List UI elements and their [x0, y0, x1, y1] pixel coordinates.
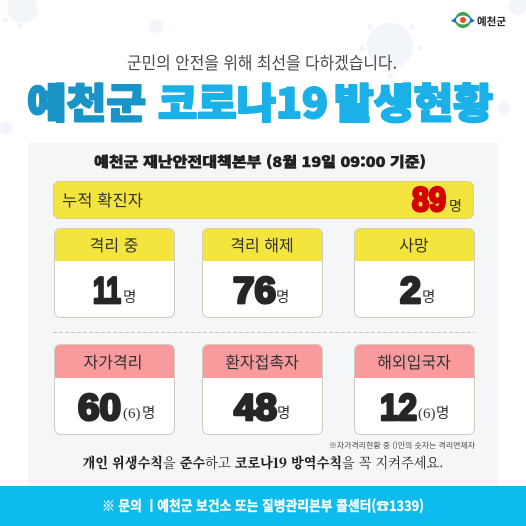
- card: released: [202, 228, 322, 318]
- card: overseas: (6): [418, 406, 436, 422]
- card: self quarantine: 60: [78, 387, 121, 428]
- card: self quarantine: [54, 344, 174, 434]
- title: [27, 70, 493, 130]
- panel heading: 예천군 재난안전대책본부 (8월 19일 09:00 기준): [94, 152, 426, 172]
- card: contacts: 명: [277, 402, 290, 423]
- card: in quarantine: 격리 중: [90, 232, 138, 256]
- card: overseas: 해외입국자: [377, 349, 451, 373]
- number: total: 89: [412, 181, 446, 219]
- card: deaths: 2: [400, 270, 421, 311]
- label: total: 누적 확진자: [62, 187, 143, 211]
- footer bar: [0, 486, 526, 526]
- icon: county emblem: [451, 12, 475, 28]
- title: 코로나19: [158, 70, 328, 130]
- total confirmed bar: [54, 181, 474, 219]
- logo: [451, 12, 506, 29]
- virus background: [0, 0, 526, 135]
- card: contacts: 48: [234, 387, 277, 428]
- card: released: 격리 해제: [230, 232, 294, 256]
- footnote: ※자가격리현황 중 ()안의 숫자는 격리면제자: [329, 440, 475, 451]
- card: overseas: [354, 344, 474, 434]
- subtitle: 군민의 안전을 위해 최선을 다하겠습니다.: [127, 49, 397, 74]
- hygiene notice: 개인 위생수칙을 준수하고 코로나19 방역수칙을 꼭 지켜주세요.: [83, 453, 443, 473]
- card: in quarantine: [54, 228, 174, 318]
- logo text: 예천군: [477, 14, 506, 29]
- card: deaths: 명: [422, 286, 435, 307]
- card: in quarantine: 11: [93, 270, 121, 311]
- card: released: 76: [233, 270, 276, 311]
- card: self quarantine: 자가격리: [84, 349, 142, 373]
- card: overseas: 12: [380, 387, 417, 428]
- unit: total: 명: [449, 196, 462, 216]
- card: overseas: 명: [436, 402, 449, 423]
- card: self quarantine: 명: [142, 402, 155, 423]
- title: 발생현황: [334, 70, 493, 130]
- card: contacts: 환자접촉자: [225, 349, 299, 373]
- card: self quarantine: (6): [123, 406, 140, 422]
- card: released: 명: [276, 286, 289, 307]
- footer text: ※ 문의 ㅣ예천군 보건소 또는 질병관리본부 콜센터(☎1339): [102, 496, 424, 516]
- panel: status: [28, 143, 498, 487]
- card: in quarantine: 명: [123, 286, 136, 307]
- card: contacts: [202, 344, 322, 434]
- card: deaths: [354, 228, 474, 318]
- title: 예천군: [27, 70, 146, 130]
- card: deaths: 사망: [399, 232, 429, 256]
